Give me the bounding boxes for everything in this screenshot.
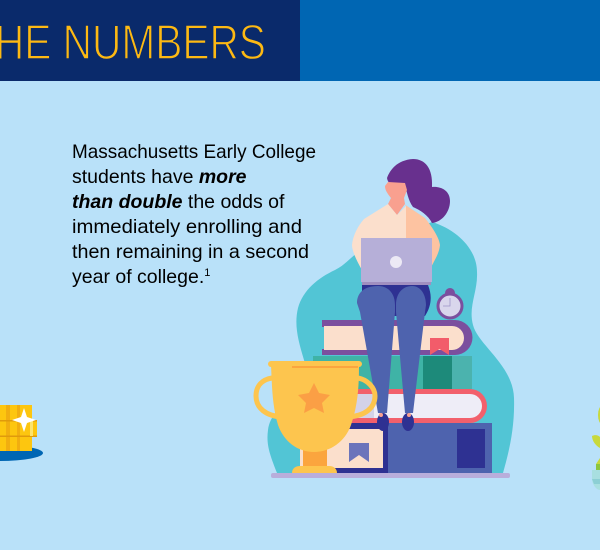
body text: students have more bbox=[72, 166, 247, 188]
top book bbox=[322, 320, 472, 355]
face and neck bbox=[385, 182, 407, 215]
shorts bbox=[362, 285, 431, 316]
torso left bbox=[352, 204, 406, 285]
torso right bbox=[404, 204, 440, 285]
hair bbox=[387, 159, 450, 223]
body text: year of college. bbox=[72, 266, 210, 288]
student bbox=[352, 159, 450, 431]
icon: plant at right edge bbox=[592, 406, 600, 490]
body text: then remaining in a second bbox=[72, 241, 309, 263]
navy book with cream pages bbox=[300, 423, 388, 473]
green books bbox=[313, 356, 423, 389]
red book bbox=[350, 389, 487, 423]
body text: than double the odds of bbox=[72, 191, 284, 213]
bookmark bbox=[430, 338, 449, 355]
right leg bbox=[396, 286, 426, 413]
alarm clock bbox=[438, 288, 462, 318]
body text: immediately enrolling and bbox=[72, 216, 302, 238]
left leg bbox=[357, 286, 395, 413]
laptop bbox=[361, 238, 432, 282]
body text: 1 bbox=[204, 267, 210, 279]
body text: Massachusetts Early College bbox=[72, 141, 316, 163]
illustration: student on books with trophy bbox=[256, 159, 514, 478]
trophy bbox=[256, 361, 375, 473]
icon: gold coins bbox=[0, 405, 43, 461]
ground line bbox=[271, 473, 510, 478]
header banner bbox=[0, 0, 600, 81]
blue book bbox=[350, 423, 492, 473]
teal blob bbox=[267, 222, 514, 473]
stack of books bbox=[300, 320, 492, 473]
shoes bbox=[377, 413, 389, 431]
